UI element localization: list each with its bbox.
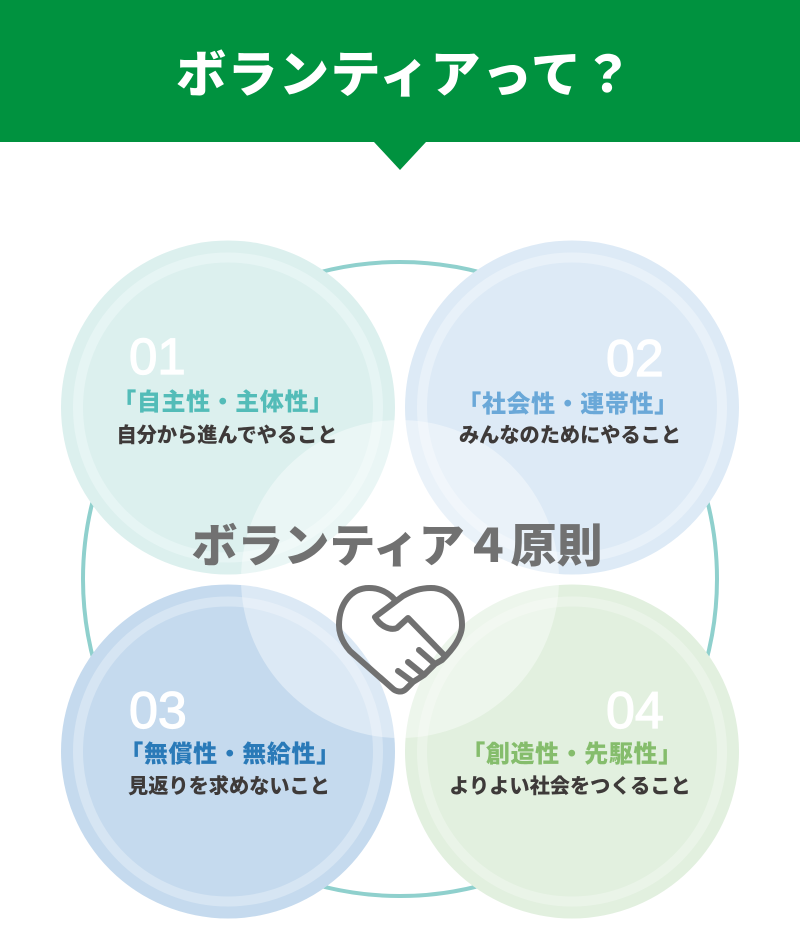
circle 02 background [405,240,739,574]
principle 01 text: 01 [129,328,186,385]
circle 01 background [61,240,395,574]
center heading: ボランティア４原則 [191,520,603,572]
principle 04 text: 04 [606,682,664,740]
principle 02 text: 02 [606,330,664,388]
principle 04 text: よりよい社会をつくること [449,775,691,798]
principle 02 text: 「社会性・連帯性」 [457,391,679,418]
principle 03 text: 見返りを求めないこと [128,774,330,798]
header banner [0,0,800,170]
principle 03 text: 「無償性・無給性」 [119,741,341,768]
circle 04 background [405,584,739,918]
icon: heart handshake [339,588,462,692]
center translucent circle [241,420,559,738]
title: ボランティアって？ [176,47,634,103]
principle 03 text [119,682,341,798]
principle 01 text: 自分から進んでやること [116,424,338,447]
principle 02 text: みんなのためにやること [459,424,681,447]
principle 02 text [457,330,681,447]
principle 03 text: 03 [129,682,187,740]
large outer ring [83,262,717,896]
principle 01 text [112,328,338,447]
principle 04 text: 「創造性・先駆性」 [461,741,683,768]
principle 01 text: 「自主性・主体性」 [112,389,334,416]
circle 03 background [61,584,395,918]
principle 04 text [449,682,691,798]
